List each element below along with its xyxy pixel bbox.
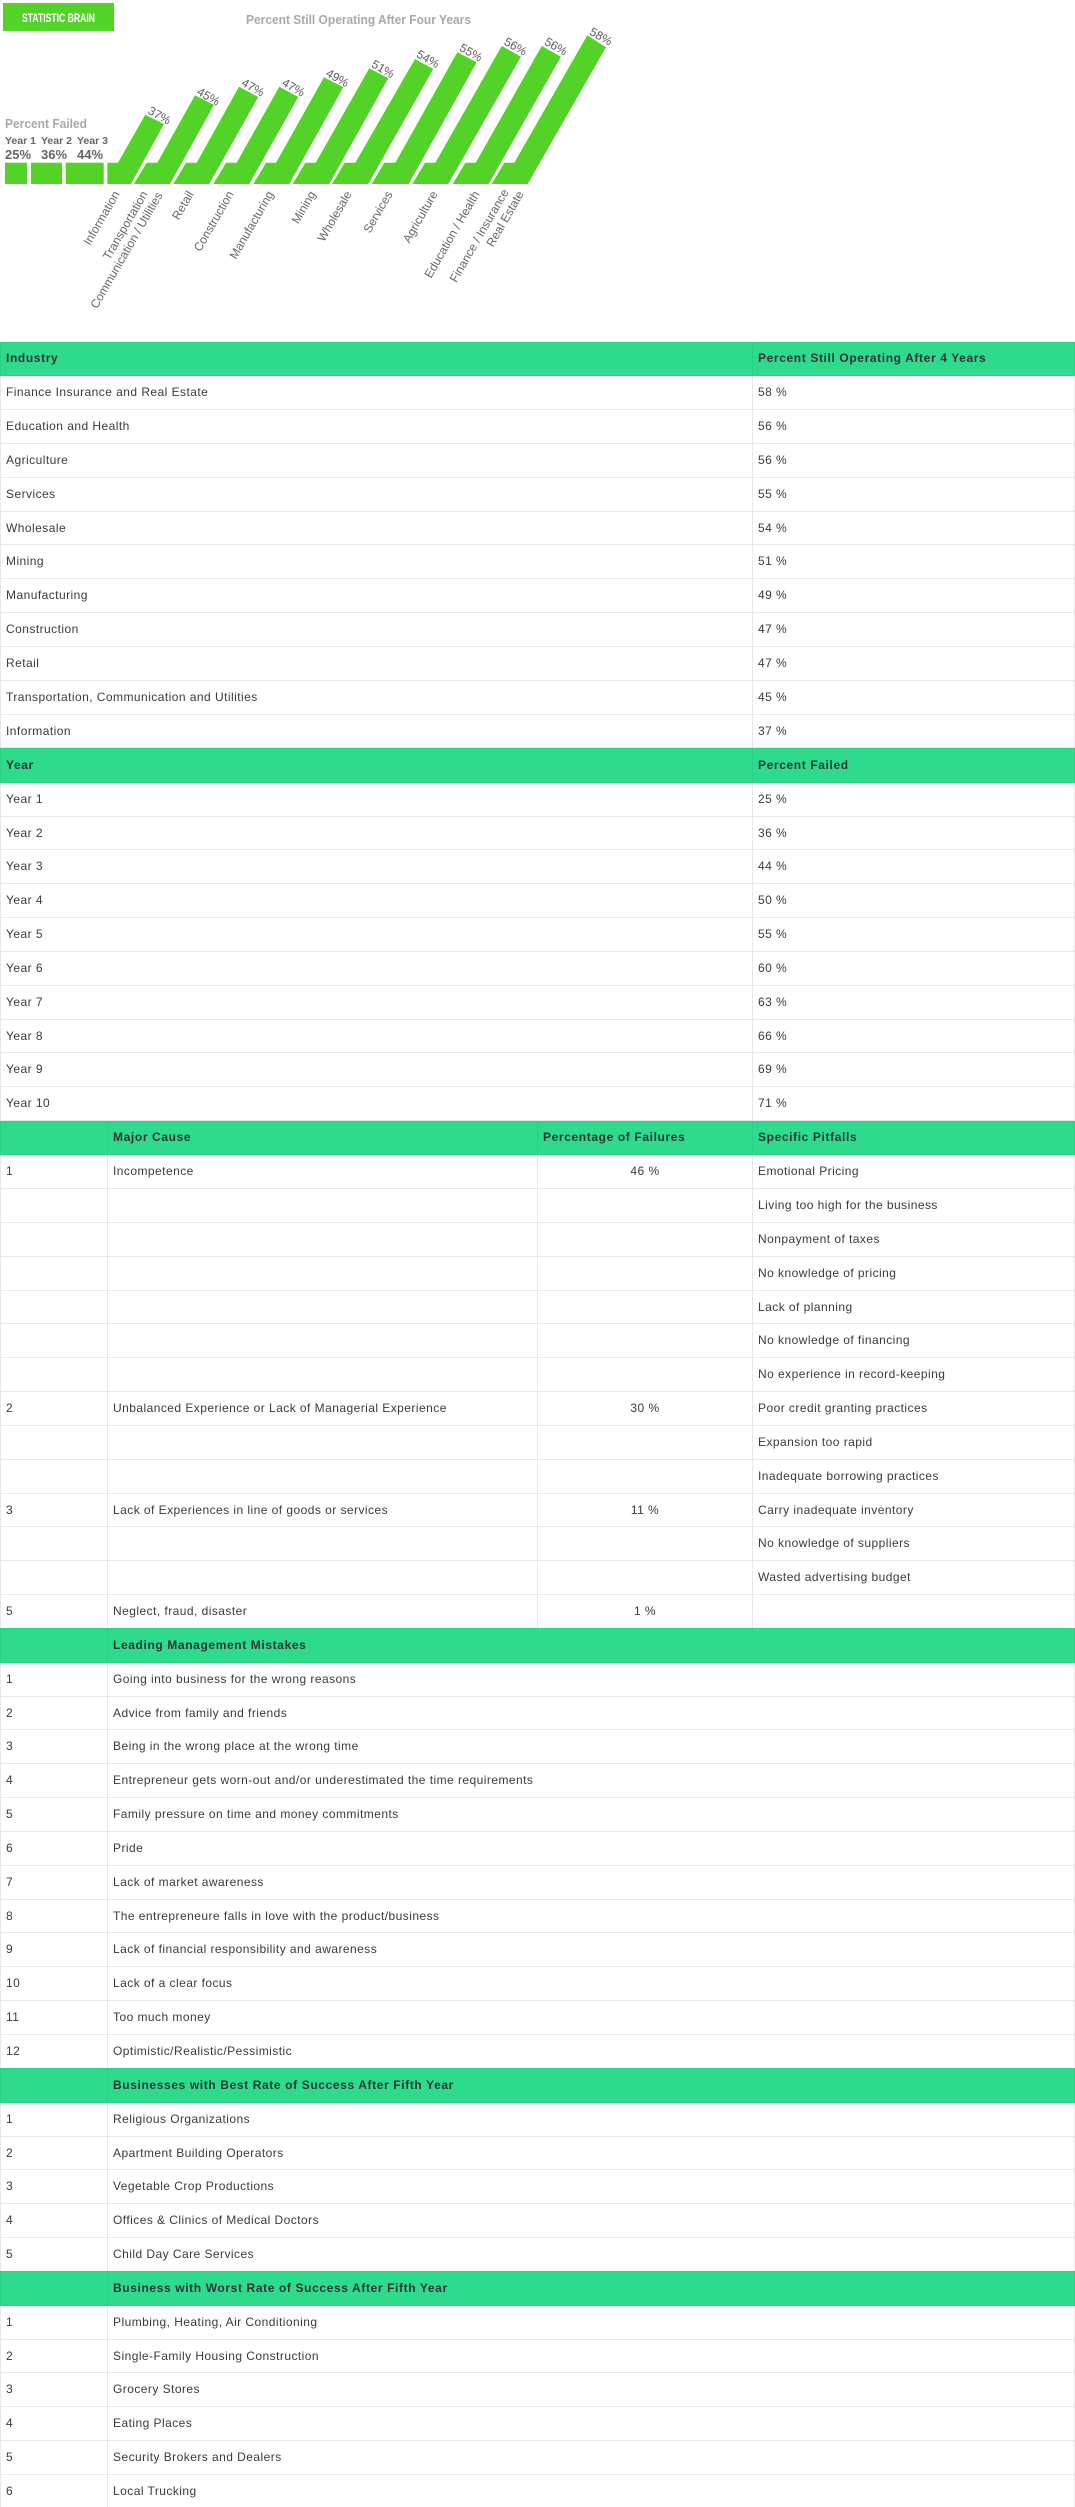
bar value labels: 37% <box>146 103 174 128</box>
table: worst rate of success after fifth year: 4 <box>6 2416 13 2430</box>
table: major causes of failure: Major Cause <box>113 1130 191 1144</box>
table: major causes of failure: No knowledge of pricing <box>758 1266 896 1280</box>
table: leading management mistakes: Advice from family and friends <box>113 1706 287 1720</box>
table: percent failed by year: Year 4 <box>6 893 43 907</box>
bar value labels: 54% <box>414 47 442 71</box>
table: percent failed by year: 55 % <box>758 927 787 941</box>
table: percent still operating by industry: Mining <box>6 554 44 568</box>
industry axis labels: Mining <box>289 188 319 226</box>
table: leading management mistakes: Going into business for the wrong reasons <box>113 1672 356 1686</box>
table: percent failed by year: 44 % <box>758 859 787 873</box>
bar: Retail 47% <box>173 87 258 184</box>
table: percent failed by year: 36 % <box>758 826 787 840</box>
table: best rate of success after fifth year: Child Day Care Services <box>113 2247 254 2261</box>
table: leading management mistakes: Lack of financial responsibility and awareness <box>113 1942 377 1956</box>
table: major causes of failure: No experience in record-keeping <box>758 1367 945 1381</box>
year 3 block: Year 3 <box>77 135 108 147</box>
logo: Statistic Brain <box>3 3 114 31</box>
table: leading management mistakes: 6 <box>6 1841 13 1855</box>
year 2 block: Year 2 <box>41 135 72 147</box>
table: worst rate of success after fifth year: Security Brokers and Dealers <box>113 2450 282 2464</box>
table: percent still operating by industry: 49 % <box>758 588 787 602</box>
table: leading management mistakes: 11 <box>6 2010 19 2024</box>
table: best rate of success after fifth year: 3 <box>6 2179 13 2193</box>
table: best rate of success after fifth year: 5 <box>6 2247 13 2261</box>
table: percent still operating by industry: Information <box>6 724 71 738</box>
table: major causes of failure: 1 % <box>634 1604 656 1618</box>
bar: Education / Health 56% <box>453 46 561 184</box>
bar value labels: 45% <box>195 84 223 109</box>
table: percent failed by year: 66 % <box>758 1029 787 1043</box>
panel: percent failed by year <box>5 117 108 184</box>
bar value labels: 56% <box>542 34 570 59</box>
table: worst rate of success after fifth year <box>0 2271 1075 2507</box>
table: percent failed by year: Percent Failed <box>758 758 849 772</box>
table: leading management mistakes: Entrepreneur gets worn-out and/or underestimated the time requirements <box>113 1773 533 1787</box>
table: major causes of failure: 11 % <box>631 1503 659 1517</box>
table: percent still operating by industry: 58 % <box>758 385 787 399</box>
table: best rate of success after fifth year: 4 <box>6 2213 13 2227</box>
table: percent failed by year: Year 3 <box>6 859 43 873</box>
table: percent still operating by industry: Transportation, Communication and Utilities <box>6 690 258 704</box>
table: major causes of failure: Carry inadequate inventory <box>758 1503 914 1517</box>
industry axis labels: Construction <box>191 188 237 254</box>
bar: Wholesale 54% <box>332 59 433 184</box>
table: percent failed by year: Year 8 <box>6 1029 43 1043</box>
industry axis labels: Finance / Insurance <box>447 186 512 285</box>
table: major causes of failure: 46 % <box>630 1164 660 1178</box>
heading: percent failed: Percent Failed <box>5 117 87 131</box>
table: best rate of success after fifth year: 2 <box>6 2146 13 2160</box>
table: best rate of success after fifth year: Businesses with Best Rate of Success After Fifth Year <box>113 2078 454 2092</box>
bar: Information 37% <box>107 115 164 184</box>
table: percent failed by year: Year 6 <box>6 961 43 975</box>
bar: Agriculture 56% <box>412 46 521 184</box>
table: leading management mistakes: Lack of a clear focus <box>113 1976 233 1990</box>
table: best rate of success after fifth year: 1 <box>6 2112 13 2126</box>
bar value labels: 47% <box>280 75 308 100</box>
table: percent still operating by industry: Finance Insurance and Real Estate <box>6 385 208 399</box>
chart title: Percent Still Operating After Four Years <box>246 12 471 27</box>
table: best rate of success after fifth year <box>0 2068 1075 2271</box>
table: major causes of failure: Nonpayment of taxes <box>758 1232 880 1246</box>
table: percent failed by year: Year <box>6 758 34 772</box>
table: major causes of failure: Wasted advertising budget <box>758 1570 911 1584</box>
year 1 block <box>5 135 36 184</box>
table: percent failed by year: 69 % <box>758 1062 787 1076</box>
table: percent still operating by industry: 37 % <box>758 724 787 738</box>
bar value labels: 51% <box>369 57 397 81</box>
table: worst rate of success after fifth year: Single-Family Housing Construction <box>113 2349 319 2363</box>
industry axis labels: Communication / Utilities <box>87 190 166 311</box>
table: major causes of failure <box>0 1121 1075 1628</box>
industry axis labels: Agriculture <box>400 188 441 245</box>
logo: Statistic Brain: STATISTIC BRAIN <box>22 11 95 25</box>
bar value labels: 47% <box>239 75 267 100</box>
table: percent failed by year: Year 1 <box>6 792 43 806</box>
bar: Services 55% <box>372 52 477 184</box>
table: percent still operating by industry: Services <box>6 487 56 501</box>
table: leading management mistakes: 5 <box>6 1807 13 1821</box>
table: percent still operating by industry: Wholesale <box>6 521 66 535</box>
table: major causes of failure: 1 <box>6 1164 13 1178</box>
table: percent failed by year: Year 9 <box>6 1062 43 1076</box>
industry axis labels: Retail <box>169 188 197 222</box>
table: best rate of success after fifth year: Religious Organizations <box>113 2112 250 2126</box>
table: major causes of failure: Inadequate borrowing practices <box>758 1469 939 1483</box>
table: worst rate of success after fifth year: 5 <box>6 2450 13 2464</box>
table: percent still operating by industry: Education and Health <box>6 419 130 433</box>
infographic chart: survival and failure rates <box>3 3 615 311</box>
table: percent still operating by industry: 55 % <box>758 487 787 501</box>
table: percent still operating by industry: 56 % <box>758 453 787 467</box>
table: major causes of failure: Emotional Pricing <box>758 1164 859 1178</box>
table: major causes of failure: Lack of Experiences in line of goods or services <box>113 1503 388 1517</box>
table: leading management mistakes: 7 <box>6 1875 13 1889</box>
industry axis labels: Education / Health <box>421 188 483 280</box>
table: major causes of failure: No knowledge of suppliers <box>758 1536 910 1550</box>
table: best rate of success after fifth year: Offices & Clinics of Medical Doctors <box>113 2213 319 2227</box>
table: leading management mistakes: 8 <box>6 1909 13 1923</box>
table: leading management mistakes: 1 <box>6 1672 13 1686</box>
table: leading management mistakes: Leading Management Mistakes <box>113 1638 306 1652</box>
industry axis labels: Real Estate <box>483 188 527 249</box>
table: best rate of success after fifth year: Apartment Building Operators <box>113 2146 284 2160</box>
table: percent still operating by industry: Industry <box>6 351 58 365</box>
table: worst rate of success after fifth year: Grocery Stores <box>113 2382 200 2396</box>
table: major causes of failure: Neglect, fraud, disaster <box>113 1604 247 1618</box>
table: percent failed by year: 71 % <box>758 1096 787 1110</box>
table: percent still operating by industry: Manufacturing <box>6 588 88 602</box>
table: worst rate of success after fifth year: 2 <box>6 2349 13 2363</box>
table: percent still operating by industry: 54 % <box>758 521 787 535</box>
bar: Transportation 45% <box>134 95 214 184</box>
year 1 block: 25% <box>5 147 31 162</box>
table: major causes of failure: Percentage of Failures <box>543 1130 685 1144</box>
table: percent still operating by industry: Construction <box>6 622 79 636</box>
table: major causes of failure: 3 <box>6 1503 13 1517</box>
bar: Construction 47% <box>213 87 298 184</box>
table: percent failed by year: 60 % <box>758 961 787 975</box>
bar value labels: 56% <box>502 34 530 59</box>
table: leading management mistakes: 9 <box>6 1942 13 1956</box>
table: leading management mistakes: 10 <box>6 1976 20 1990</box>
table: major causes of failure: No knowledge of financing <box>758 1333 910 1347</box>
table: percent still operating by industry: 51 % <box>758 554 787 568</box>
table: major causes of failure: 30 % <box>630 1401 660 1415</box>
year 2 block <box>31 135 72 184</box>
table: best rate of success after fifth year: Vegetable Crop Productions <box>113 2179 274 2193</box>
table: percent failed by year: 25 % <box>758 792 787 806</box>
table: worst rate of success after fifth year: Business with Worst Rate of Success After Fifth Year <box>113 2281 448 2295</box>
table: percent failed by year: 50 % <box>758 893 787 907</box>
bar value labels: 49% <box>324 66 352 90</box>
industry axis labels: Wholesale <box>314 188 355 244</box>
table: percent still operating by industry: 45 % <box>758 690 787 704</box>
table: worst rate of success after fifth year: 6 <box>6 2484 13 2498</box>
table: leading management mistakes: 3 <box>6 1739 13 1753</box>
bar: Mining 51% <box>293 68 388 184</box>
table: percent failed by year: Year 7 <box>6 995 43 1009</box>
table: leading management mistakes: Too much money <box>113 2010 211 2024</box>
bar value labels: 58% <box>587 24 615 49</box>
table: percent failed by year: 63 % <box>758 995 787 1009</box>
year 1 block: Year 1 <box>5 135 36 147</box>
table: leading management mistakes: The entrepreneure falls in love with the product/business <box>113 1909 440 1923</box>
table: percent still operating by industry: Percent Still Operating After 4 Years <box>758 351 986 365</box>
table: worst rate of success after fifth year: Eating Places <box>113 2416 192 2430</box>
bar: Finance / Insurance / Real Estate 58% <box>492 35 606 184</box>
table: leading management mistakes <box>0 1628 1075 2068</box>
table: percent still operating by industry: 47 % <box>758 656 787 670</box>
industry axis labels: Transportation <box>100 188 151 262</box>
table: percent still operating by industry: Agriculture <box>6 453 68 467</box>
table: major causes of failure: Living too high for the business <box>758 1198 938 1212</box>
table: leading management mistakes: 12 <box>6 2044 20 2058</box>
table: percent failed by year <box>0 748 1075 1121</box>
table: percent failed by year: Year 2 <box>6 826 43 840</box>
table: worst rate of success after fifth year: 1 <box>6 2315 13 2329</box>
table: leading management mistakes: Optimistic/Realistic/Pessimistic <box>113 2044 292 2058</box>
table: worst rate of success after fifth year: Local Trucking <box>113 2484 197 2498</box>
bar value labels <box>146 24 615 128</box>
year 2 block: 36% <box>41 147 67 162</box>
bar value labels: 55% <box>457 40 485 65</box>
table: worst rate of success after fifth year: 3 <box>6 2382 13 2396</box>
table: leading management mistakes: 4 <box>6 1773 13 1787</box>
industry axis labels <box>80 186 527 311</box>
bar: Manufacturing 49% <box>253 77 343 184</box>
industry axis labels: Manufacturing <box>226 188 277 261</box>
table: major causes of failure: Expansion too rapid <box>758 1435 873 1449</box>
table: worst rate of success after fifth year: Plumbing, Heating, Air Conditioning <box>113 2315 318 2329</box>
table: major causes of failure: Unbalanced Experience or Lack of Managerial Experience <box>113 1401 447 1415</box>
bar chart: percent still operating by industry <box>107 35 606 184</box>
table: leading management mistakes: 2 <box>6 1706 13 1720</box>
table: major causes of failure: Incompetence <box>113 1164 194 1178</box>
table: percent still operating by industry: 56 % <box>758 419 787 433</box>
table: major causes of failure: Specific Pitfalls <box>758 1130 857 1144</box>
table: percent still operating by industry: 47 % <box>758 622 787 636</box>
table: major causes of failure: Lack of planning <box>758 1300 853 1314</box>
table: leading management mistakes: Being in the wrong place at the wrong time <box>113 1739 359 1753</box>
year 3 block <box>66 135 108 184</box>
table: major causes of failure: Poor credit granting practices <box>758 1401 928 1415</box>
table: major causes of failure: 2 <box>6 1401 13 1415</box>
table: percent still operating by industry: Retail <box>6 656 39 670</box>
table: major causes of failure: 5 <box>6 1604 13 1618</box>
table: percent failed by year: Year 10 <box>6 1096 50 1110</box>
table: leading management mistakes: Lack of market awareness <box>113 1875 264 1889</box>
table: leading management mistakes: Pride <box>113 1841 143 1855</box>
industry axis labels: Services <box>360 188 396 235</box>
table: percent failed by year: Year 5 <box>6 927 43 941</box>
industry axis labels: Information <box>80 188 123 247</box>
table: leading management mistakes: Family pressure on time and money commitments <box>113 1807 399 1821</box>
year 3 block: 44% <box>77 147 103 162</box>
table: percent still operating by industry <box>0 342 1075 748</box>
